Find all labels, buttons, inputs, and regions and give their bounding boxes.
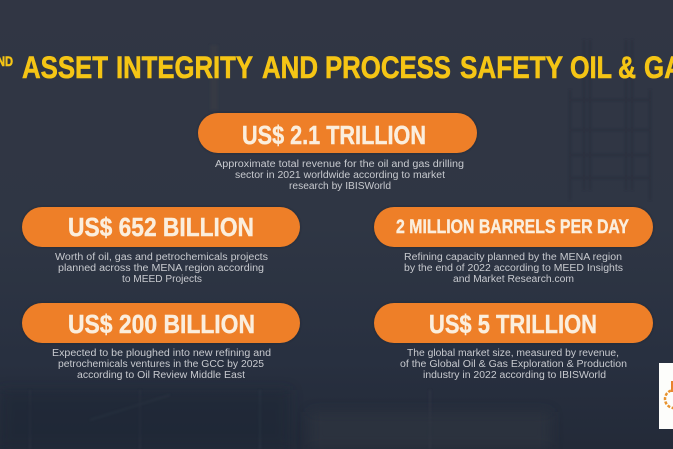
pill: US$ 5 trillion: US$ 5 TRILLION xyxy=(429,311,597,339)
description xyxy=(404,252,623,285)
title: & xyxy=(618,49,636,85)
title: ASSET xyxy=(22,49,108,85)
pill: 2 million barrels per day xyxy=(374,207,653,247)
pill: US$ 5 trillion xyxy=(374,303,653,343)
pill: US$ 2.1 trillion xyxy=(198,113,477,153)
title: INTEGRITY xyxy=(116,49,253,85)
description: planned across the MENA region according xyxy=(58,263,264,274)
description xyxy=(215,159,464,192)
pill: US$ 652 billion xyxy=(22,207,300,247)
logo: white card with gear xyxy=(659,363,673,429)
pill: US$ 200 billion xyxy=(22,303,300,343)
description: Expected to be ploughed into new refining and xyxy=(52,348,271,359)
title xyxy=(0,49,673,85)
title: OIL xyxy=(570,49,612,85)
description: The global market size, measured by revenue, xyxy=(407,348,619,359)
stat: 2 million barrels per day xyxy=(374,207,653,285)
description xyxy=(400,348,627,381)
pill: US$ 2.1 trillion: US$ 2.1 TRILLION xyxy=(242,122,426,150)
stat: US$ 652 billion xyxy=(22,207,300,285)
pill: US$ 652 billion: US$ 652 BILLION xyxy=(68,214,254,242)
description: to MEED Projects xyxy=(122,274,202,285)
stat: US$ 2.1 trillion xyxy=(198,113,477,192)
description: of the Global Oil & Gas Exploration & Production xyxy=(400,359,627,370)
description: by the end of 2022 according to MEED Insights xyxy=(404,263,623,274)
pill: US$ 200 billion: US$ 200 BILLION xyxy=(68,311,255,339)
stat: US$ 5 trillion xyxy=(374,303,653,381)
description xyxy=(52,348,271,381)
title: SAFETY xyxy=(460,49,563,85)
description xyxy=(55,252,268,285)
description: research by IBISWorld xyxy=(289,181,391,192)
description: industry in 2022 according to IBISWorld xyxy=(423,370,606,381)
title: PROCESS xyxy=(325,49,451,85)
stat: US$ 200 billion xyxy=(22,303,300,381)
description: Worth of oil, gas and petrochemicals projects xyxy=(55,252,268,263)
description: sector in 2021 worldwide according to market xyxy=(235,170,445,181)
description: petrochemicals ventures in the GCC by 2025 xyxy=(58,359,264,370)
description: according to Oil Review Middle East xyxy=(77,370,245,381)
description: and Market Research.com xyxy=(453,274,574,285)
description: Approximate total revenue for the oil and gas drilling xyxy=(215,159,464,170)
title: AND xyxy=(262,49,318,85)
description: Refining capacity planned by the MENA region xyxy=(404,252,622,263)
